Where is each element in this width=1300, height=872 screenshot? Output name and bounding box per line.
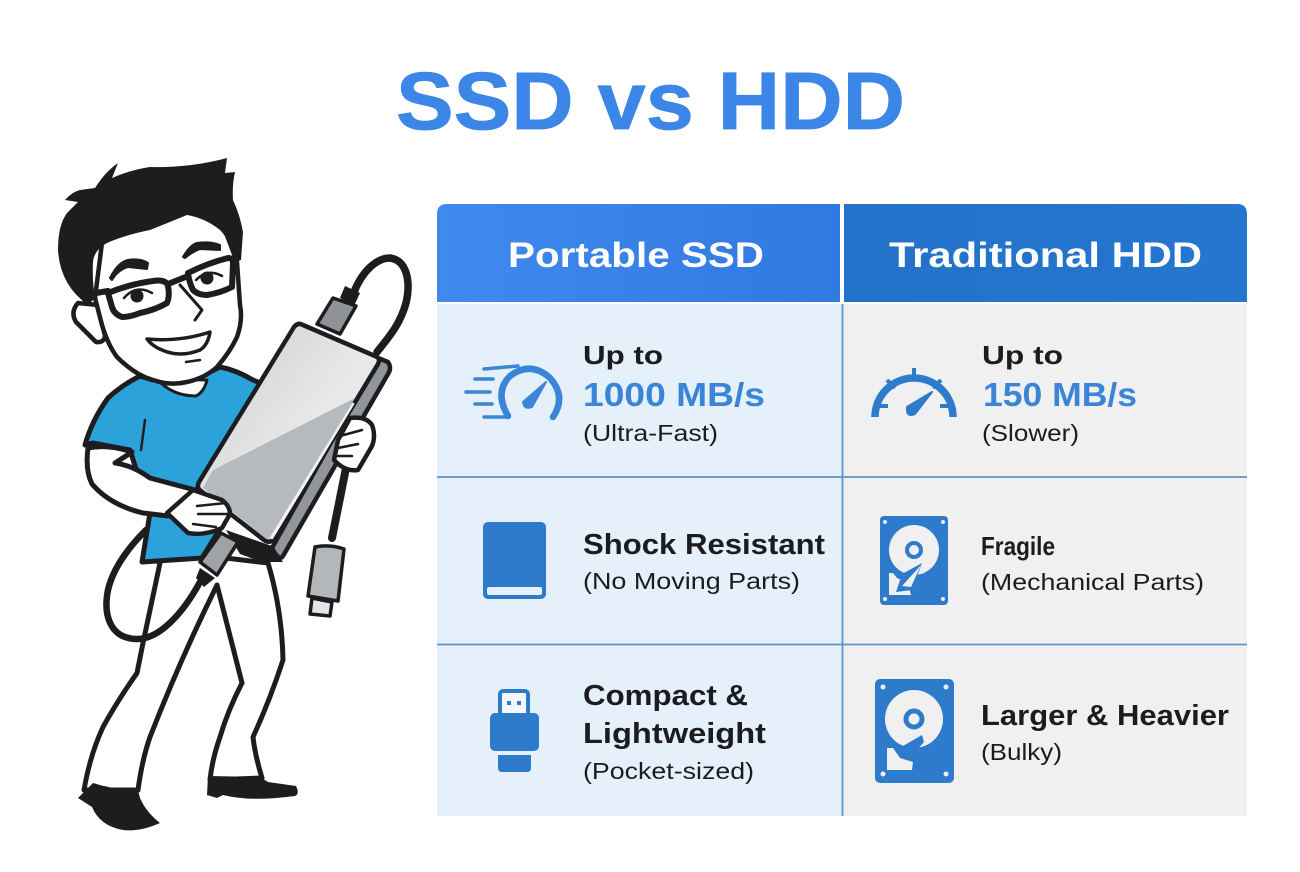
header: Traditional HDD xyxy=(844,204,1247,302)
durability text xyxy=(583,529,825,594)
size text xyxy=(583,680,766,784)
speed text: (Slower) xyxy=(982,420,1079,446)
cell: SSD size xyxy=(490,680,766,784)
icon: fast speedometer xyxy=(466,366,559,417)
header: Traditional HDD: Traditional HDD xyxy=(889,236,1202,275)
icon: solid drive xyxy=(483,522,546,599)
speed text xyxy=(982,340,1137,446)
cell: HDD speed xyxy=(875,340,1137,446)
speed text: Up to xyxy=(583,340,663,370)
device shaded lower panel xyxy=(203,398,355,538)
right shoe xyxy=(207,776,298,799)
cell: HDD size xyxy=(875,679,1229,783)
left shoe xyxy=(78,783,160,830)
icon: hard disk xyxy=(880,516,948,605)
glasses xyxy=(96,258,233,317)
illustration: man holding portable SSD xyxy=(58,158,408,830)
cable loop at lower left xyxy=(106,530,200,639)
sleeve seam xyxy=(141,420,145,450)
shirt xyxy=(85,367,300,562)
durability text: (No Moving Parts) xyxy=(583,568,800,594)
left hand xyxy=(167,490,230,534)
size text: Lightweight xyxy=(583,718,766,750)
left eye xyxy=(124,289,152,302)
mouth xyxy=(147,332,210,354)
cell: SSD speed xyxy=(466,340,765,446)
face xyxy=(95,205,241,384)
header: Portable SSD: Portable SSD xyxy=(508,236,764,275)
icon: speedometer xyxy=(875,368,953,417)
left column background xyxy=(437,304,842,816)
collar xyxy=(157,379,207,396)
icon: large hard disk xyxy=(875,679,954,783)
plug tip xyxy=(310,598,332,616)
speed text: 1000 MB/s xyxy=(583,376,765,413)
durability text xyxy=(981,531,1204,595)
underside shadow xyxy=(226,530,283,562)
device face xyxy=(198,324,379,542)
right column background xyxy=(843,304,1247,816)
speed text: Up to xyxy=(982,340,1063,370)
cable top xyxy=(354,258,408,352)
durability text: (Mechanical Parts) xyxy=(981,569,1204,595)
icon: USB stick xyxy=(490,691,539,772)
top connector strain relief xyxy=(340,286,360,306)
size text: Larger & Heavier xyxy=(981,700,1229,732)
cell: HDD durability xyxy=(880,516,1204,605)
speed text: 150 MB/s xyxy=(983,376,1137,413)
connector strain relief xyxy=(196,568,215,587)
cell: SSD durability xyxy=(483,522,825,599)
ear xyxy=(73,303,105,342)
edge highlight xyxy=(272,404,353,538)
trousers xyxy=(84,555,283,790)
header: Portable SSD xyxy=(437,204,840,302)
right eyebrow xyxy=(183,242,220,258)
top connector xyxy=(317,298,356,334)
title: SSD vs HDD xyxy=(396,56,905,147)
hanging USB-C plug xyxy=(308,546,344,601)
speed text xyxy=(583,340,765,446)
comparison table xyxy=(437,204,1247,816)
cable hanging xyxy=(332,468,346,538)
speed text: (Ultra-Fast) xyxy=(583,420,718,446)
lower connector xyxy=(200,533,238,575)
size text: (Bulky) xyxy=(981,739,1062,765)
arm xyxy=(87,447,195,516)
grid lines xyxy=(437,304,1247,816)
hair xyxy=(58,158,243,305)
size text xyxy=(981,700,1229,765)
size text: Compact & xyxy=(583,680,748,712)
right eye xyxy=(196,272,222,284)
chin line xyxy=(186,360,200,362)
size text: (Pocket-sized) xyxy=(583,758,754,784)
right hand xyxy=(334,418,374,470)
device side xyxy=(272,358,390,558)
nose xyxy=(180,285,202,320)
durability text: Shock Resistant xyxy=(583,529,825,561)
left eyebrow xyxy=(110,259,148,280)
durability text: Fragile xyxy=(981,531,1055,561)
